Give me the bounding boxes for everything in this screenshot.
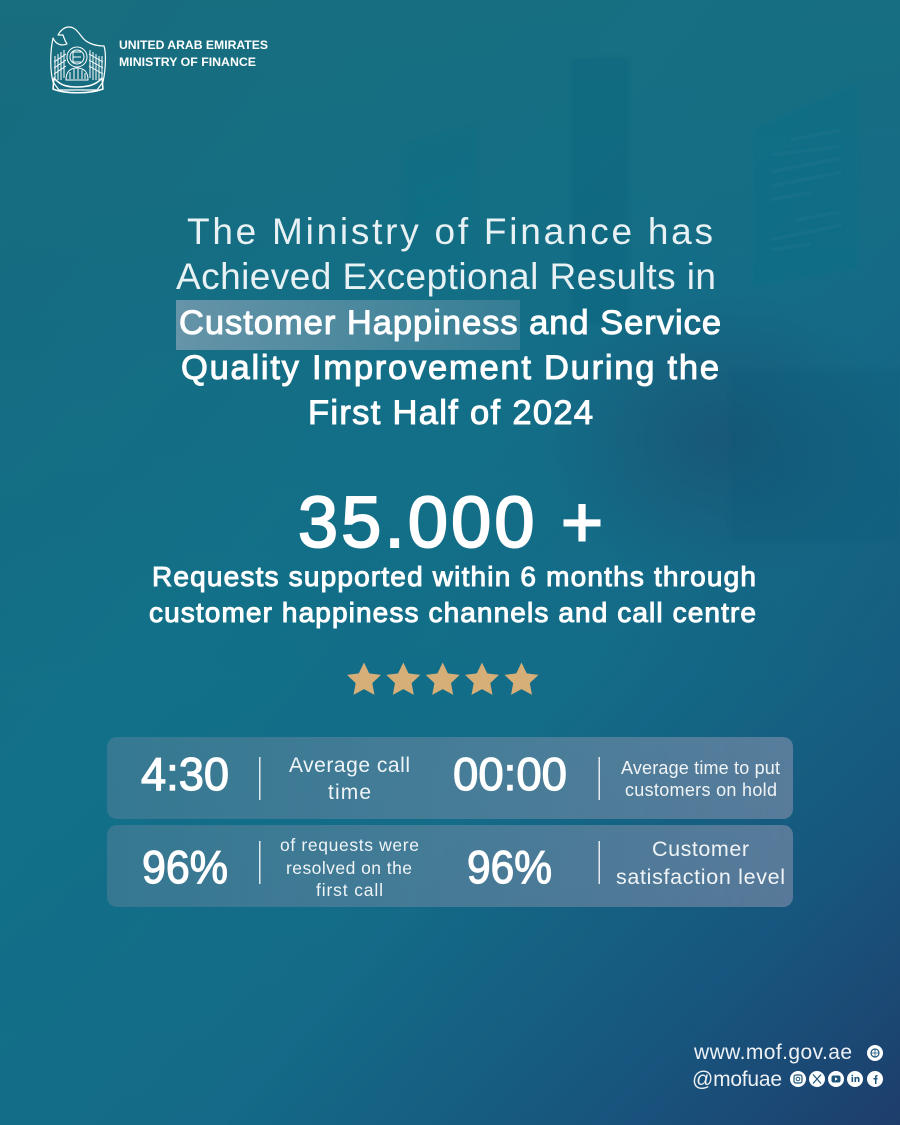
- highlight behind Customer Happiness: [176, 300, 520, 350]
- headline description: [149, 561, 756, 628]
- organisation name: MINISTRY OF FINANCE: [119, 55, 256, 69]
- title: Achieved Exceptional Results in: [176, 256, 716, 297]
- five star rating: [347, 662, 538, 695]
- organisation name: UNITED ARAB EMIRATES: [119, 38, 268, 52]
- title: First Half of 2024: [308, 394, 593, 432]
- label: resolved on first call: [280, 835, 419, 900]
- background: faint office documents: [403, 58, 900, 540]
- panel: call times: [107, 737, 793, 819]
- panel: resolution and satisfaction: [107, 825, 793, 907]
- label: resolved on first call: first call: [316, 880, 383, 900]
- label: average call time: [289, 754, 410, 804]
- logo: UAE emblem: [51, 27, 105, 93]
- icon: youtube: [828, 1071, 844, 1087]
- label: resolved on first call: of requests were: [280, 835, 419, 855]
- label: average call time: time: [328, 781, 371, 804]
- label: average hold time: [621, 758, 780, 800]
- icon: website globe: [867, 1045, 883, 1061]
- footer: website: www.mof.gov.ae: [693, 1041, 852, 1064]
- stat: 00:00: 00:00: [453, 748, 567, 800]
- icon: instagram: [790, 1071, 806, 1087]
- label: average hold time: customers on hold: [625, 780, 777, 800]
- stat: 96% first call: 96%: [142, 841, 228, 893]
- headline description: Requests supported within 6 months through: [152, 561, 756, 592]
- title: The Ministry of Finance has: [187, 211, 713, 252]
- title: Customer Happiness and Service: [179, 304, 721, 342]
- icon: facebook: [867, 1071, 883, 1087]
- headline description: customer happiness channels and call centre: [149, 597, 756, 628]
- title: [176, 211, 721, 432]
- icon: linkedin: [847, 1071, 863, 1087]
- organisation name: [119, 38, 268, 69]
- stat: 96% satisfaction: 96%: [467, 841, 552, 893]
- headline number: 35.000 +: [298, 483, 603, 563]
- stat: 4:30: 4:30: [141, 748, 229, 800]
- label: average hold time: Average time to put: [621, 758, 780, 778]
- label: resolved on first call: resolved on the: [286, 858, 412, 878]
- footer: social handle: @mofuae: [692, 1068, 782, 1091]
- label: customer satisfaction level: satisfaction level: [616, 865, 785, 889]
- label: average call time: Average call: [289, 754, 410, 777]
- title: Quality Improvement During the: [181, 349, 719, 387]
- label: customer satisfaction level: Customer: [652, 837, 749, 861]
- icon: X: [809, 1071, 825, 1087]
- label: customer satisfaction level: [616, 837, 785, 889]
